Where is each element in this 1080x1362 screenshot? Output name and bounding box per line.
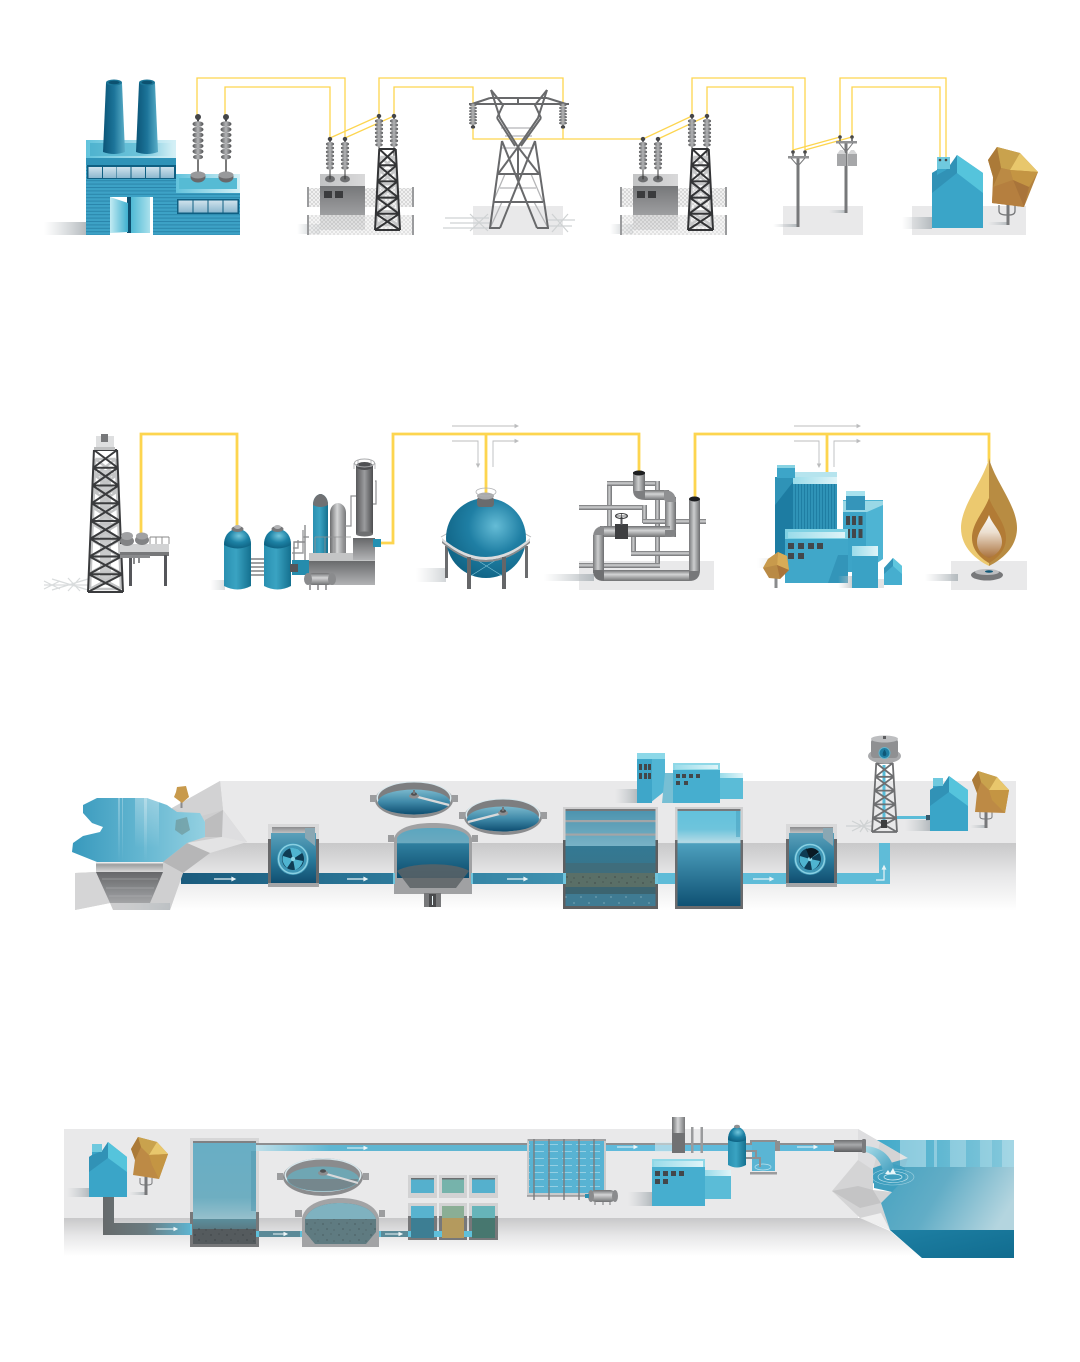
platform [120,532,169,586]
icon: power plant factory [44,80,240,235]
icon: twin blue gas tanks [224,525,291,590]
icon: gold polygonal tree [988,147,1038,225]
door [110,197,153,235]
upper windows [87,165,176,179]
lower windows [177,199,239,214]
icon: house [902,155,983,229]
icon: treatment buildings [615,753,743,803]
icon: gold tree row 3 [970,771,1009,828]
icon: control building row 4 [628,1159,731,1206]
icon: aeration cells top row [408,1175,498,1198]
icon: blower unit [655,1117,703,1153]
outfall rocks [832,1129,908,1230]
icon: gas flame burner [925,458,1017,581]
ripple and outfall stream [866,1146,914,1192]
ground panels: power row [473,206,1026,235]
icon: disinfection tank and chamber [728,1125,780,1174]
small house [884,558,902,585]
pipe: raw water channel [181,843,890,884]
front block [852,546,878,588]
icon: clarifier 2 [459,798,547,835]
outfall pipe [834,1139,866,1153]
icon: water tower [846,736,930,832]
icon: substation 1 [297,114,414,235]
icon: pole with transformers [829,135,857,213]
reservoir water [72,798,205,903]
icon: intake pump [268,824,319,887]
icon: digester [295,1198,385,1247]
valve [615,514,628,539]
icon: city buildings cluster [757,465,902,588]
flow arrows: wastewater side [156,1146,817,1236]
river water [873,1140,1014,1258]
icon: gold tree row 4 [129,1137,168,1195]
chimneys [103,80,158,154]
pipe: sewage from house [103,1197,190,1235]
icon: clarifier 1 [370,782,458,818]
icon: sedimentation tank [388,823,478,907]
main block [785,529,848,583]
horizontal tank [304,573,336,590]
icon: distribution pump [786,824,837,887]
icon: primary settling tank [190,1138,259,1247]
icon: multilayer filter tank [563,807,658,909]
mid-rise [843,491,883,572]
ground shadows: gas row [210,561,1027,590]
icon: house row 4 [67,1142,127,1197]
pipe: overhead treated line [256,1143,835,1151]
icon: small tree on bank [174,786,189,808]
icon: transmission pylon [443,90,575,232]
icon: aeration cells bottom row [408,1203,498,1240]
icon: substation 2 [610,114,727,235]
icon: refinery [290,459,381,590]
yellow power lines [197,78,946,160]
flow arrows: raw side [214,866,886,880]
rooftop insulators [190,114,234,182]
panel: wastewater ground [64,1129,920,1256]
tall striped tower [775,465,837,555]
icon: utility pole [773,150,809,227]
thin grey flow arrows [452,424,860,467]
pipes between tanks [256,1231,408,1237]
horizontal pressure tank [585,1190,618,1205]
tree [763,552,789,588]
icon: spherical gas holder [441,488,531,589]
icon: oil derrick with platform [44,434,169,592]
yellow gas lines [141,434,989,543]
thin pipes [579,481,706,568]
icon: clarifier row 4 [277,1158,369,1196]
icon: clear water tank [675,807,743,909]
icon: membrane filter rack [527,1139,618,1205]
reservoir rock walls [75,781,247,910]
icon: pipe network with valve [579,470,706,581]
icon: house row 3 [905,776,968,831]
panel: water supply ground [160,781,1016,911]
